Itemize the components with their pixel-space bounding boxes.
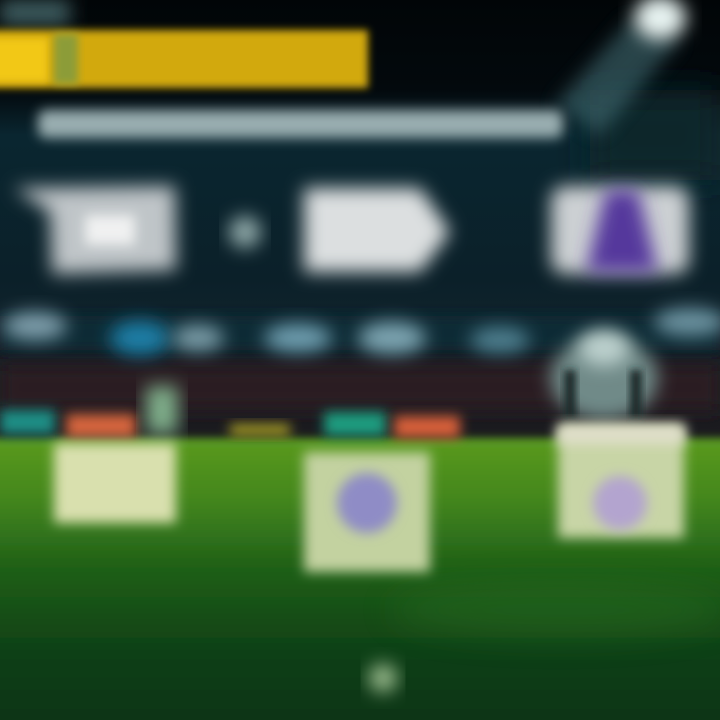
floodlight and beam [555,0,686,135]
small glow on the grass [369,664,397,692]
player figure [550,330,658,420]
panel: left arrow card [14,186,176,274]
icon: purple badge [337,473,397,533]
icon: purple badge right [593,476,647,530]
crowd strip [0,308,720,355]
grass pitch [0,438,720,720]
panel: lower right card [558,424,684,538]
panel: middle arrow card [304,188,450,272]
panel: right card with purple figure [551,186,689,274]
yellow banner [0,30,368,88]
icon: plus circle [229,216,261,248]
colored advertising stripe [0,386,460,438]
panel: lower left card [54,443,176,523]
stadium background [0,0,720,450]
title text block [38,110,563,138]
panel: lower middle card [304,452,430,572]
